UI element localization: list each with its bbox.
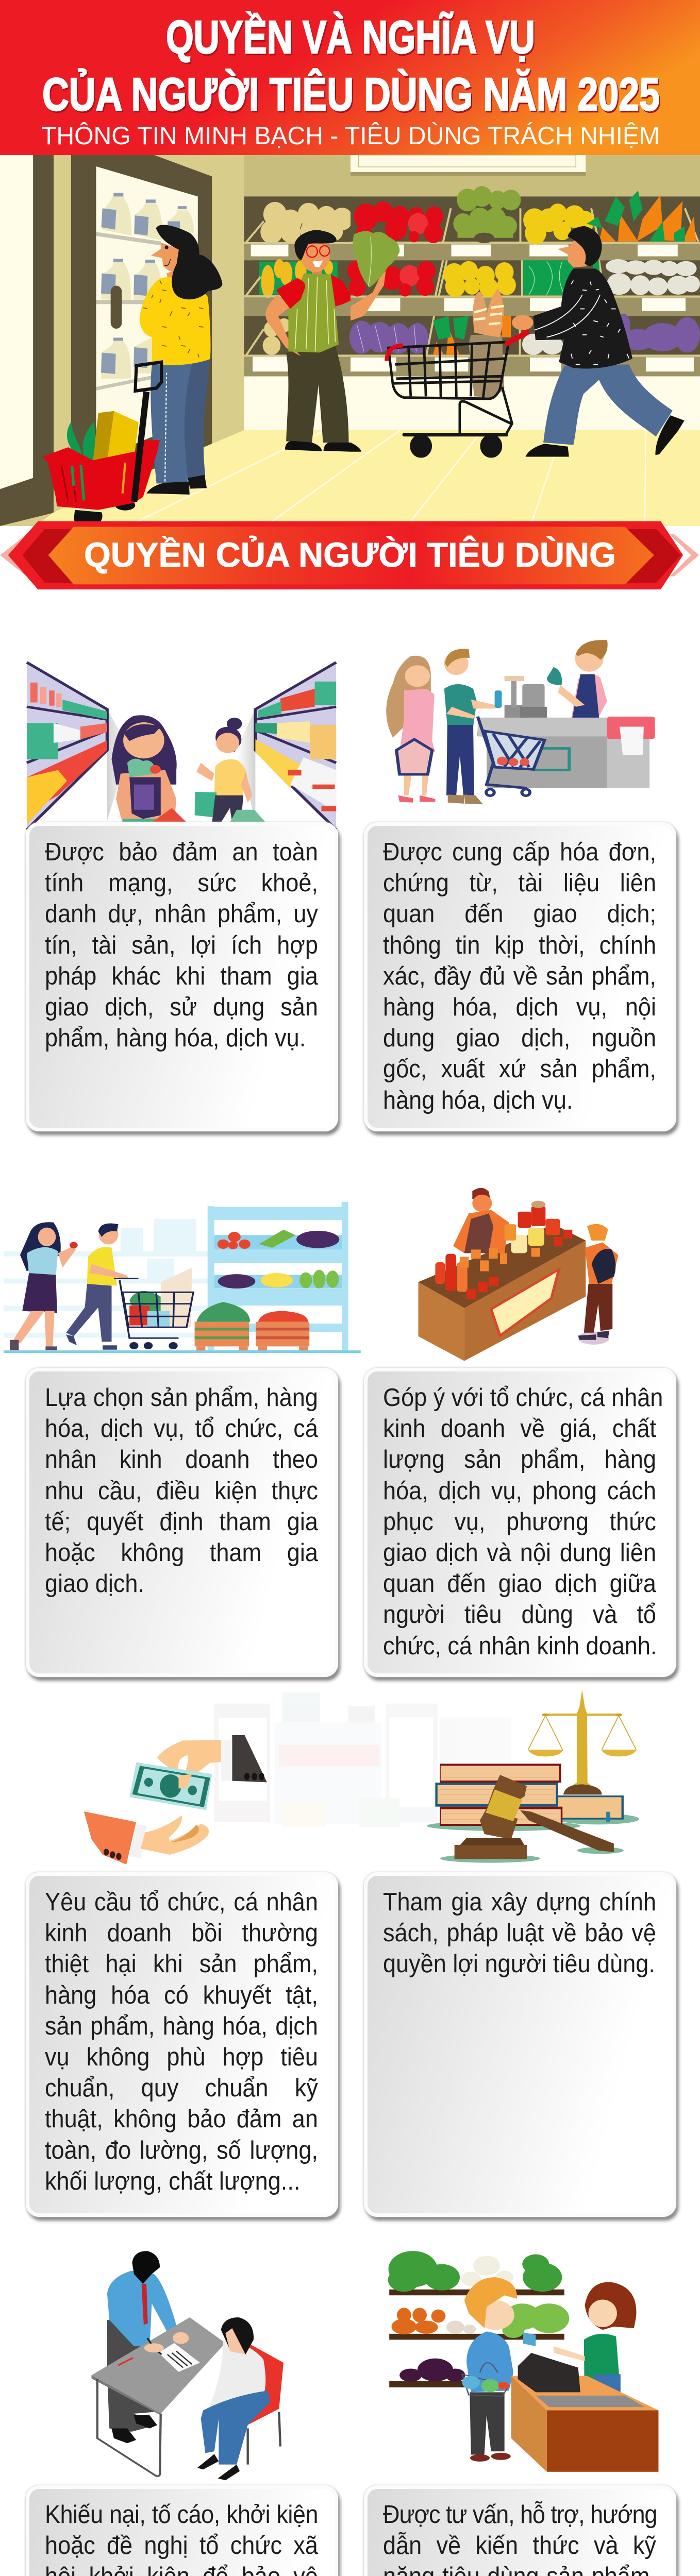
lettuce in hand and arm <box>351 231 399 320</box>
standing man <box>107 2251 188 2443</box>
illustration: produce shop with customer and cashier <box>388 2251 658 2472</box>
card text: safety right: giao dịch, sử dụng sản <box>45 993 318 1021</box>
card text: feedback right: chức, cá nhân kinh doanh. <box>383 1632 657 1660</box>
man with glasses and lettuce <box>265 230 351 452</box>
banner: rights of the consumer <box>0 521 699 589</box>
card text: feedback right: hóa, dịch vụ, phong cách <box>383 1477 656 1505</box>
red basket with goods <box>42 362 161 528</box>
upper hand and sleeve <box>157 1735 267 1786</box>
card text: compensation right: khối lượng, chất lượng... <box>45 2167 300 2195</box>
card: compensation right <box>26 1872 338 2217</box>
header: title block <box>0 0 700 155</box>
illustration: couple at checkout counter <box>386 640 655 804</box>
produce: yellow fruit <box>443 204 594 297</box>
illustration: vendor stall with jars and customer <box>419 1188 619 1361</box>
shelves left <box>244 202 353 376</box>
gavel <box>455 1775 614 1859</box>
card text: feedback right: người tiêu dùng và tổ <box>383 1601 656 1629</box>
illustration: couple shopping with cart beside shelves <box>4 1202 361 1353</box>
vendor <box>453 1188 509 1253</box>
card text: choice right: hoặc không tham gia <box>45 1539 318 1567</box>
produce: greens <box>523 260 575 295</box>
man customer <box>444 649 502 804</box>
card text: information right <box>383 838 656 1114</box>
illustration: hands exchanging money <box>84 1735 267 1865</box>
card text: safety right: tính mạng, sức khoẻ, <box>45 869 318 897</box>
woman with grocery bag <box>112 715 187 824</box>
banknote <box>129 1762 212 1810</box>
card text: consultation right: dẫn về kiến thức và kỹ <box>383 2532 656 2560</box>
man pushing cart <box>512 226 685 456</box>
shopping cart <box>114 1267 193 1349</box>
shopping cart <box>478 717 545 795</box>
card: feedback right <box>364 1368 676 1677</box>
illustration: gavel, law books and scales <box>427 1690 639 1863</box>
man's shoe <box>351 443 361 452</box>
card: consultation right <box>364 2485 676 2576</box>
illustration: two women in grocery aisle <box>27 663 336 829</box>
woman customer <box>386 656 435 803</box>
illustration: man and woman signing a document at a table <box>92 2251 284 2480</box>
lower hand and sleeve <box>84 1811 209 1865</box>
table and papers <box>92 2317 225 2476</box>
card text: choice right: giao dịch. <box>45 1570 144 1598</box>
card text: complaint right: hoặc đề nghị tổ chức xã <box>45 2532 318 2560</box>
card text: feedback right: kinh doanh về giá, chất <box>383 1415 656 1443</box>
card text: complaint right: Khiếu nại, tố cáo, khởi kiện <box>45 2501 318 2529</box>
seated woman and chair <box>197 2317 284 2480</box>
card: safety right <box>26 822 338 1131</box>
hero illustration: produce shelves, cart and man pushing <box>347 155 700 526</box>
subtitle: THÔNG TIN MINH BẠCH - TIÊU DÙNG TRÁCH NHIỆM <box>41 122 660 150</box>
card text: compensation right: thiệt hại khi sản phẩm, <box>45 1950 318 1978</box>
card text: policy participation right <box>383 1888 656 1978</box>
card text: information right: gốc, xuất xứ sản phẩm, <box>383 1055 656 1083</box>
banner ribbon <box>0 521 699 589</box>
crates <box>195 1302 309 1351</box>
card text: choice right <box>45 1384 318 1598</box>
title line 1: QUYỀN VÀ NGHĨA VỤ <box>166 11 535 63</box>
produce: purple cabbage and eggplant <box>349 314 700 354</box>
floor lines <box>351 430 646 524</box>
card text: consultation right <box>383 2501 657 2576</box>
card text: information right: hàng hóa, dịch vụ, nội <box>383 993 656 1021</box>
milk jugs <box>96 193 194 391</box>
card text: information right: xác, đầy đủ về sản phẩm, <box>383 962 656 990</box>
faded store background illustration <box>214 1692 511 1827</box>
woman looking in fridge <box>140 225 223 495</box>
card text: choice right: nhu cầu, điều kiện thực <box>45 1477 318 1505</box>
card text: compensation right: vụ không phù hợp tiêu <box>45 2043 318 2071</box>
card text: information right: Được cung cấp hóa đơn, <box>383 838 656 866</box>
card text: choice right: nhân kinh doanh theo <box>45 1446 318 1473</box>
card text: information right: quan đến giao dịch; <box>383 900 656 928</box>
hero illustration: supermarket left half with fridge and woman <box>0 155 353 528</box>
customer with backpack <box>578 1224 619 1345</box>
scales <box>528 1690 637 1794</box>
cashier <box>547 640 608 718</box>
card text: policy participation right: Tham gia xây dựng chính <box>383 1888 656 1916</box>
card text: choice right: Lựa chọn sản phẩm, hàng <box>45 1384 318 1412</box>
card text: compensation right <box>45 1888 318 2195</box>
card: information right <box>364 822 676 1131</box>
card text: policy participation right: sách, pháp luật về bảo vệ <box>383 1919 656 1947</box>
card text: feedback right: Góp ý với tổ chức, cá nhân <box>383 1384 663 1412</box>
card text: information right: thông tin kịp thời, chính <box>383 931 656 959</box>
card text: safety right: tín, tài sản, lợi ích hợp <box>45 931 318 959</box>
card text: safety right <box>45 838 318 1052</box>
card text: compensation right: toàn, đo lường, số lượng, <box>45 2137 318 2164</box>
produce: carrots <box>433 195 696 355</box>
card text: safety right: danh dự, nhân phẩm, uy <box>45 900 318 928</box>
card text: policy participation right: quyền lợi người tiêu dùng. <box>383 1950 655 1978</box>
cash register and counter <box>511 2332 658 2472</box>
man with cart <box>66 1224 128 1350</box>
card: complaint right <box>26 2485 338 2576</box>
card text: compensation right: Yêu cầu tổ chức, cá nhân <box>45 1888 318 1916</box>
card text: compensation right: sản phẩm, hàng hóa, dịch <box>45 2012 318 2040</box>
cashier woman <box>554 2282 636 2438</box>
banner heading: QUYỀN CỦA NGƯỜI TIÊU DÙNG <box>84 536 616 574</box>
card text: safety right: Được bảo đảm an toàn <box>45 838 318 866</box>
card text: compensation right: chuẩn, quy chuẩn kỹ <box>45 2074 318 2102</box>
law books <box>435 1764 624 1826</box>
card text: feedback right: giao dịch và nội dung liên <box>383 1539 656 1567</box>
shelves and vegetables <box>388 2251 569 2387</box>
jars <box>435 1201 572 1299</box>
card text: information right: hàng hóa, dịch vụ. <box>383 1087 573 1114</box>
card text: safety right: pháp khác khi tham gia <box>45 962 318 990</box>
card text: information right: chứng từ, tài liệu liên <box>383 869 656 897</box>
produce: white garlic <box>522 259 700 355</box>
card text: compensation right: thuật, không bảo đảm an <box>45 2105 318 2133</box>
card text: feedback right: quan đến giao dịch giữa <box>383 1570 656 1598</box>
woman <box>10 1222 78 1350</box>
card text: feedback right: lượng sản phẩm, hàng <box>383 1446 656 1473</box>
card text: consultation right: Được tư vấn, hỗ trợ, hướng <box>383 2501 657 2529</box>
thumb on banknote <box>178 1774 192 1789</box>
card: choice right <box>26 1368 338 1677</box>
card text: compensation right: kinh doanh bồi thường <box>45 1919 318 1947</box>
card text: information right: dung giao dịch, nguồn <box>383 1024 656 1052</box>
card text: complaint right <box>45 2501 318 2576</box>
card text: choice right: tế; quyết định tham gia <box>45 1508 318 1536</box>
bread and shopping bag in cart <box>469 289 511 398</box>
shopping cart <box>387 331 529 456</box>
card text: compensation right: hàng hóa có khuyết tật, <box>45 1981 318 2009</box>
card: policy participation right <box>364 1872 676 2217</box>
produce: tomatoes <box>347 201 443 297</box>
customer boy <box>462 2277 517 2462</box>
woman with yellow blouse <box>195 718 265 822</box>
card text: feedback right <box>383 1384 663 1660</box>
card text: feedback right: phục vụ, phương thức <box>383 1508 656 1536</box>
produce: lettuce <box>453 186 521 243</box>
card text: choice right: hóa, dịch vụ, tổ chức, cá <box>45 1415 318 1443</box>
shelf unit <box>208 1202 348 1352</box>
left shelf <box>27 663 336 829</box>
card text: safety right: phẩm, hàng hóa, dịch vụ. <box>45 1024 306 1052</box>
shelf bands and price tags <box>351 208 700 376</box>
